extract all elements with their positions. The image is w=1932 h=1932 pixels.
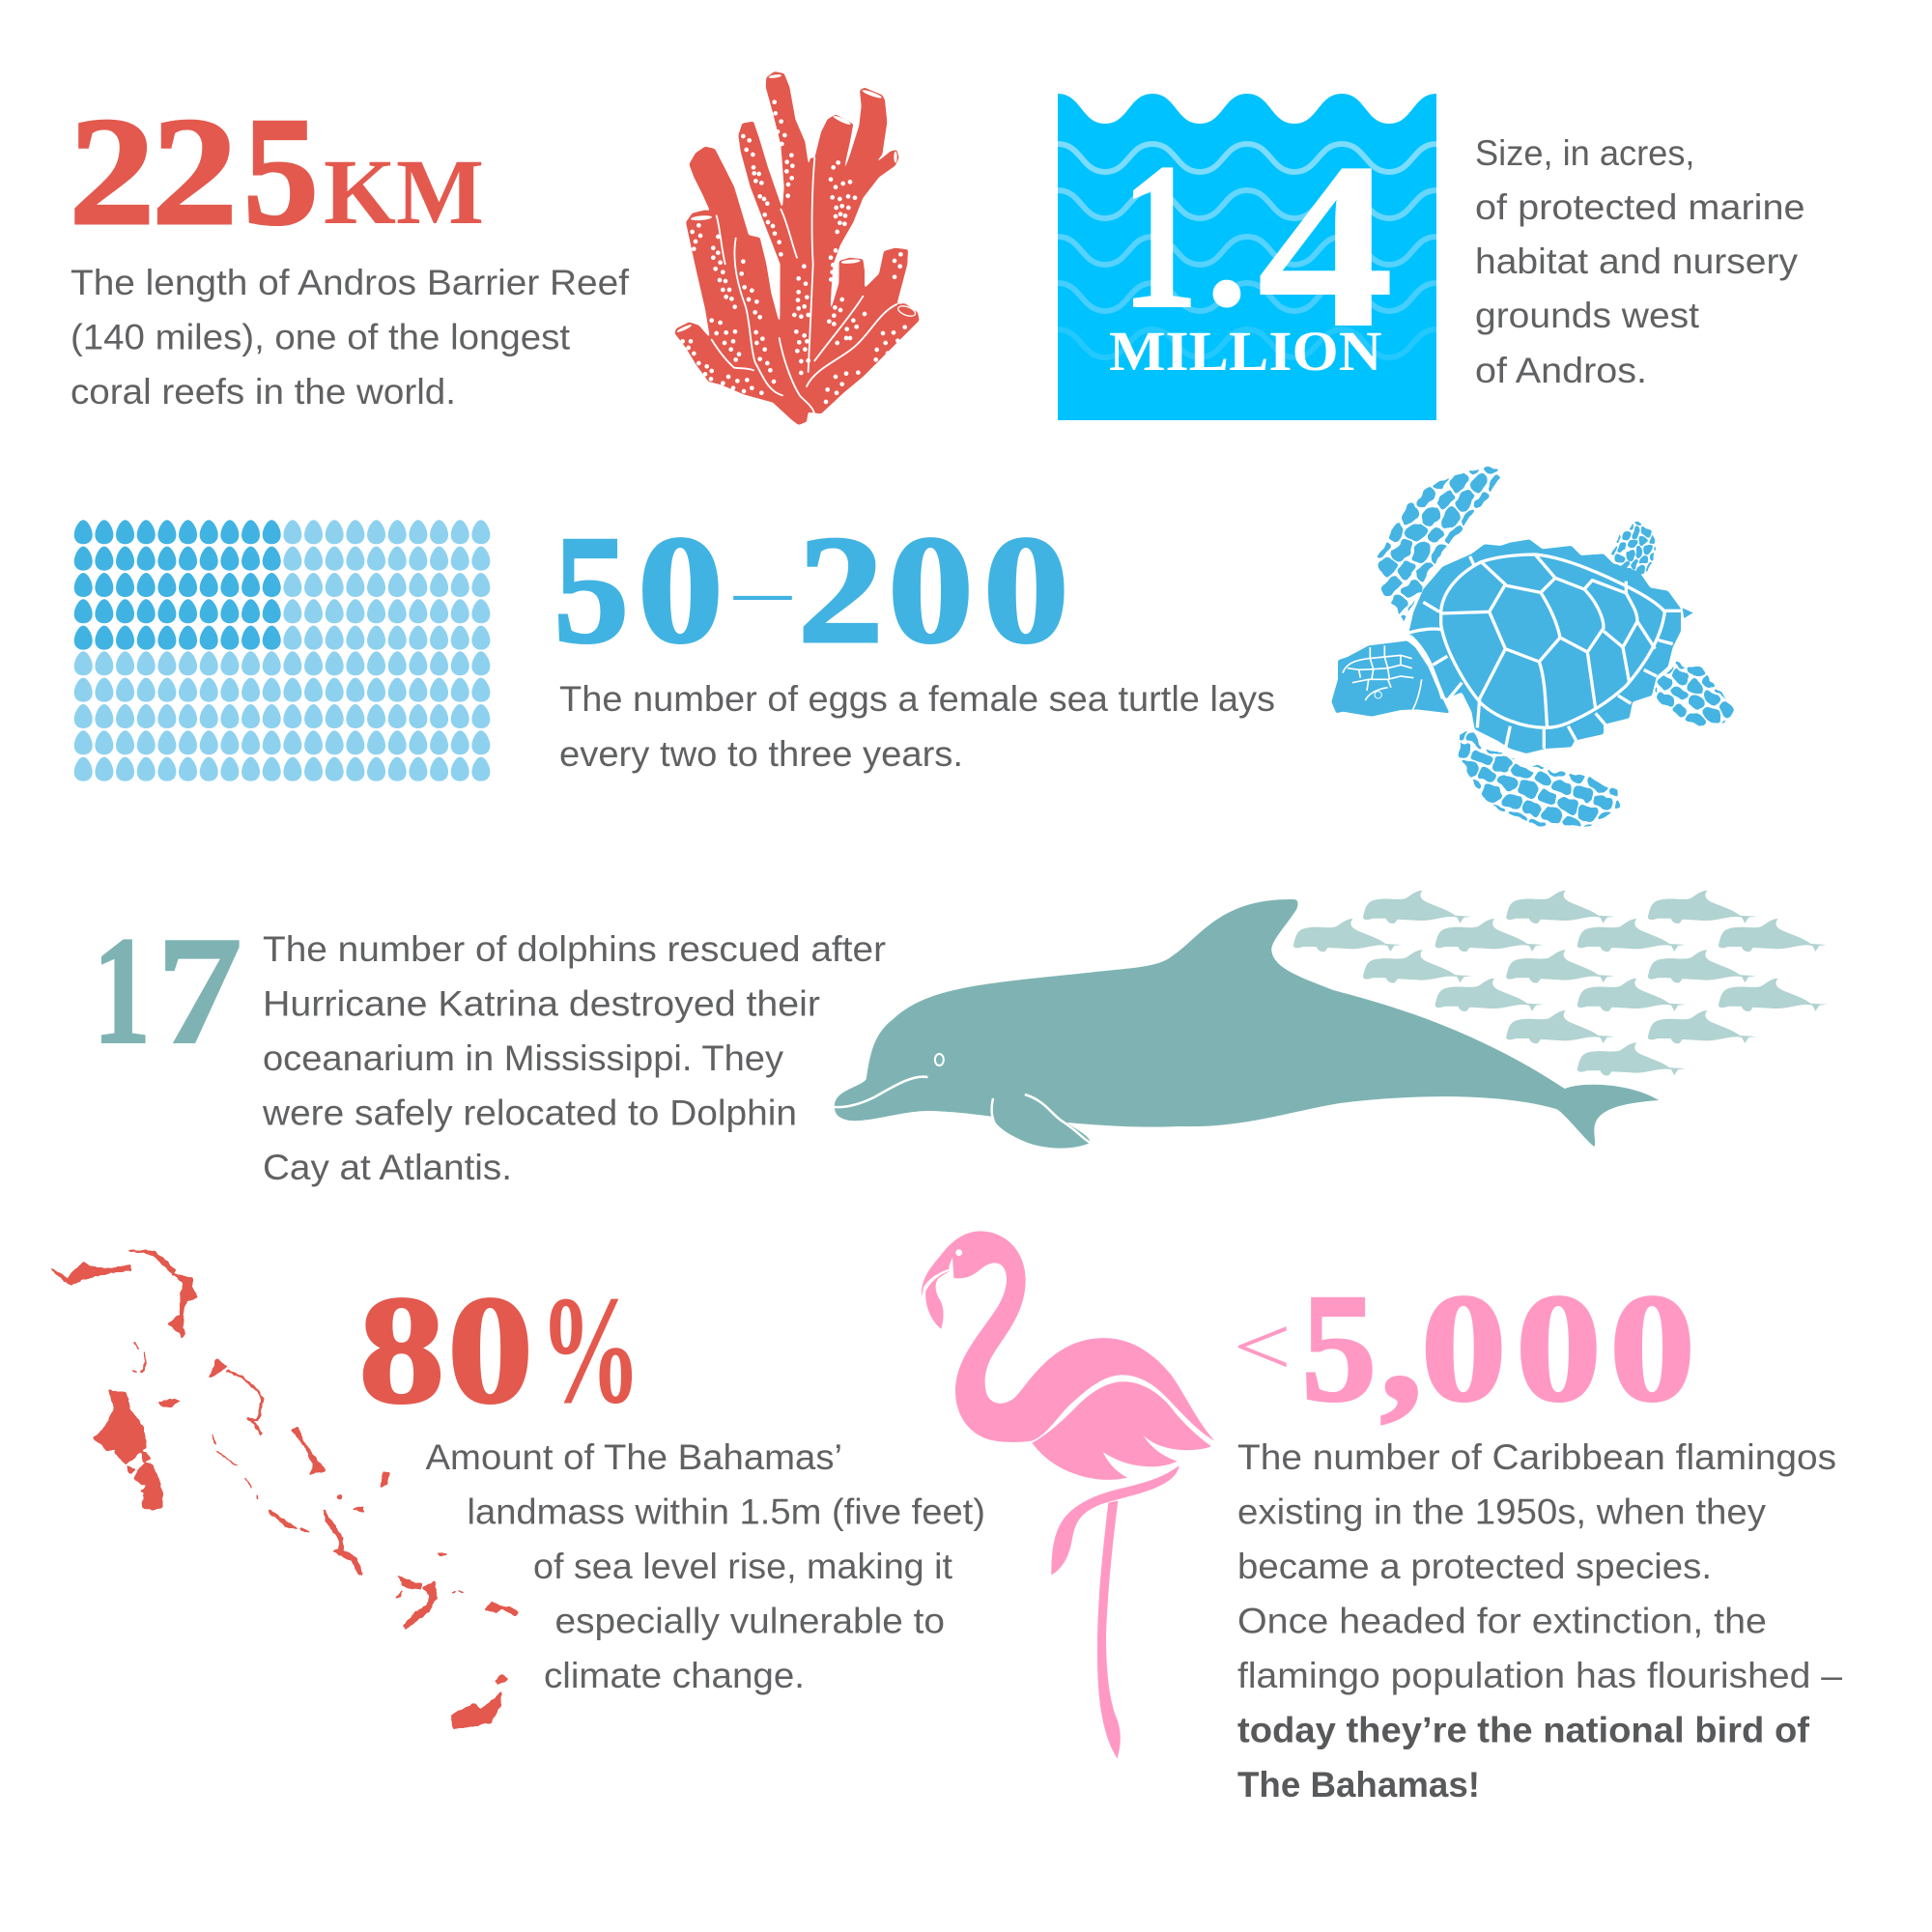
text: marine habitat description: of Andros. (1475, 351, 1647, 390)
text: flamingo description: The Bahamas! (1237, 1765, 1480, 1804)
figure: 1.4 million: 1 (1121, 118, 1199, 354)
text: reef description: (140 miles), one of the longest (71, 317, 571, 357)
text: marine habitat description: of protected marine (1475, 187, 1805, 227)
text: landmass description: climate change. (544, 1656, 805, 1695)
text: marine habitat description: Size, in acres, (1475, 133, 1694, 173)
text: eggs description: every two to three years. (559, 734, 963, 774)
text: landmass description: of sea level rise, making it (533, 1547, 953, 1586)
text: flamingo description: became a protected species. (1237, 1547, 1712, 1586)
heading: <5,000: < (1233, 1300, 1292, 1394)
text: dolphins description: oceanarium in Mississippi. They (263, 1038, 784, 1078)
text: eggs description: The number of eggs a female sea turtle lays (559, 679, 1275, 719)
text: dolphins description: Hurricane Katrina destroyed their (263, 983, 820, 1024)
heading: 80%: % (539, 1264, 641, 1435)
tail (1683, 608, 1693, 618)
text: flamingo description: The number of Caribbean flamingos (1237, 1437, 1836, 1477)
text: dolphins description: Cay at Atlantis. (263, 1148, 512, 1187)
panel: landmass at risk (359, 1264, 985, 1695)
text: landmass description: landmass within 1.5m (five feet) (468, 1492, 985, 1532)
icon: school of small dolphins (1293, 891, 1827, 1075)
heading: 50–200 (554, 503, 1069, 676)
text: marine habitat description: habitat and nursery (1475, 242, 1799, 281)
heading: 225 km (69, 85, 484, 258)
heading: <5,000: 5 (1301, 1264, 1377, 1435)
wave lines (1058, 144, 1436, 357)
shell scute lines (1408, 555, 1681, 749)
heading: 50–200: 0 (638, 503, 724, 675)
icon: sea turtle (1331, 467, 1734, 828)
text: landmass description (425, 1437, 985, 1695)
text: marine habitat description: grounds west (1475, 296, 1700, 335)
text: dolphins description: The number of dolphins rescued after (263, 929, 886, 969)
top wave cut-out (1057, 93, 1437, 124)
text: reef description (71, 263, 630, 412)
heading: 225 km: KM (324, 140, 484, 243)
panel: 1.4 million water block (1057, 93, 1437, 420)
flippers (1379, 467, 1734, 828)
heading: 225 km: 22 (69, 85, 238, 257)
figure: 1.4 million: MILLION (1109, 320, 1382, 383)
text: reef description: The length of Andros Barrier Reef (71, 263, 630, 302)
head (1331, 640, 1450, 717)
icon: map of The Bahamas (51, 1250, 519, 1728)
text: flamingo description: today they’re the national bird of (1237, 1710, 1810, 1750)
water background (1058, 94, 1436, 420)
heading: <5,000 (1233, 1262, 1695, 1435)
panel: reef length (69, 85, 630, 412)
heading: <5,000: ,000 (1380, 1262, 1695, 1434)
text: marine habitat description (1475, 133, 1805, 390)
heading: 50–200: – (733, 546, 792, 635)
heading: 17 (93, 904, 242, 1076)
panel: flamingo population (1233, 1262, 1842, 1804)
heading: 17: 7 (156, 904, 242, 1076)
icon: coral (674, 71, 920, 425)
text: flamingo description: flamingo population has flourished – (1237, 1656, 1842, 1695)
panel: dolphins rescued (93, 904, 886, 1187)
text: flamingo description: Once headed for extinction, the (1237, 1602, 1767, 1640)
heading: 225 km: 5 (243, 87, 319, 258)
text: reef description: coral reefs in the world. (71, 372, 456, 412)
figure: 1.4 million: . (1206, 152, 1248, 343)
icon: large dolphin (835, 899, 1659, 1149)
panel: turtle eggs (554, 503, 1275, 774)
text: dolphins description (262, 929, 886, 1187)
heading: 80% (359, 1264, 641, 1435)
text: landmass description: Amount of The Bahamas’ (425, 1437, 842, 1477)
figure: 1.4 million: 4 (1257, 113, 1395, 378)
shell outer rim (1408, 539, 1681, 753)
heading: 80%: 80 (359, 1264, 533, 1435)
text: flamingo description: existing in the 1950s, when they (1237, 1492, 1767, 1532)
text: landmass description: especially vulnerable to (554, 1602, 945, 1640)
text: flamingo description (1237, 1437, 1842, 1804)
icon: flamingo (922, 1232, 1214, 1759)
heading: 50–200: 200 (798, 503, 1069, 675)
text: dolphins description: were safely relocated to Dolphin (262, 1094, 797, 1132)
carapace (1441, 554, 1664, 727)
heading: 17: 1 (93, 904, 151, 1076)
chart: egg pictogram grid (74, 520, 490, 781)
heading: 50–200: 5 (554, 505, 629, 676)
figure: 1.4 million (1109, 113, 1395, 383)
text: eggs description (559, 679, 1275, 774)
